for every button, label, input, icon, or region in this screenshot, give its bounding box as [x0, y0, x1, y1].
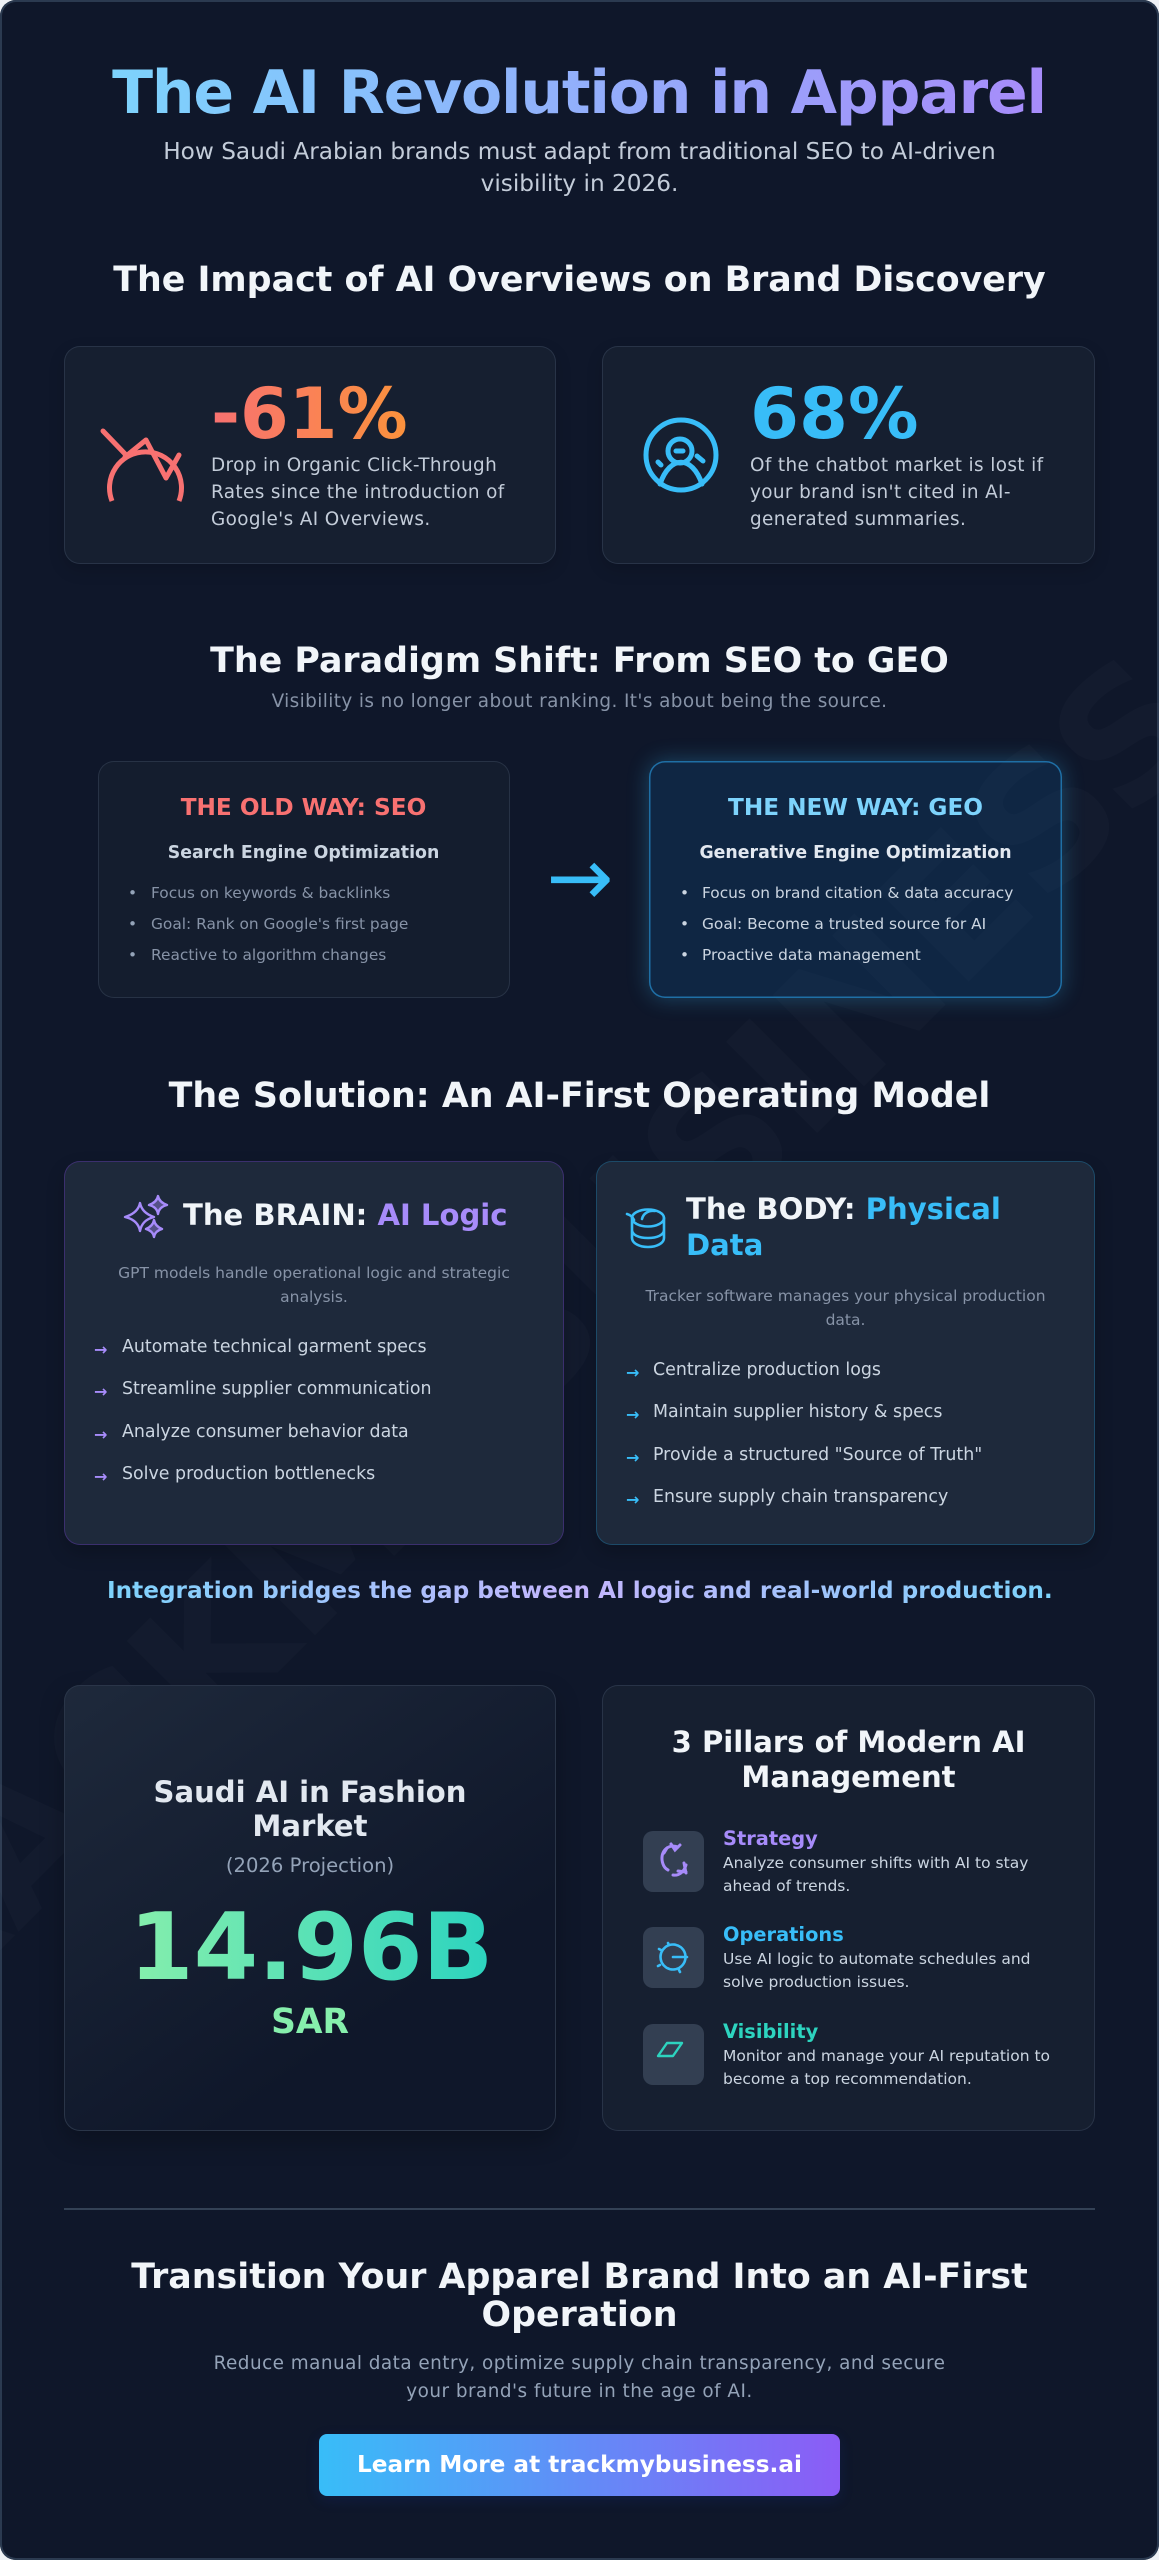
icon: strategy: [643, 1831, 704, 1892]
feature list: →: [94, 1467, 107, 1486]
panel heading: Saudi AI in Fashion: [153, 1775, 466, 1809]
call to action text: [214, 2353, 945, 2402]
panel heading: Data: [686, 1228, 763, 1262]
feature list: Streamline supplier communication: [122, 1379, 432, 1399]
call to action text: Reduce manual data entry, optimize supply chain transparency, and secure: [214, 2353, 945, 2374]
icon: sparkles: [124, 1194, 168, 1238]
feature list: →: [626, 1448, 639, 1467]
feature list: Analyze consumer behavior data: [122, 1422, 409, 1442]
heading: paradigm shift: The Paradigm Shift: From SEO to GEO: [210, 641, 949, 681]
panel heading: [672, 1725, 1025, 1794]
icon: falling chart over arc: [100, 428, 184, 502]
icon: database: [626, 1208, 666, 1248]
panel: market size: [64, 1685, 556, 2131]
pillar: visibility: [723, 2020, 1050, 2088]
market value: 14.96B: [129, 1893, 493, 2001]
feature list: Ensure supply chain transparency: [653, 1487, 948, 1507]
pillar: operations: [723, 1923, 1031, 1991]
panel heading: 3 Pillars of Modern AI: [672, 1725, 1025, 1759]
pillar description: Analyze consumer shifts with AI to stay: [723, 1854, 1028, 1872]
panel heading: Market: [252, 1809, 368, 1843]
arrow: SEO to GEO: →: [546, 831, 614, 924]
feature list: Centralize production logs: [653, 1360, 881, 1380]
stat description: Rates since the introduction of: [211, 482, 505, 503]
heading: call to action: Transition Your Apparel Brand Into an AI-First: [131, 2257, 1028, 2297]
stat description: generated summaries.: [750, 509, 966, 530]
panel description: Tracker software manages your physical production: [645, 1287, 1046, 1305]
title: The AI Revolution in Apparel: [112, 58, 1046, 128]
call to action text: your brand's future in the age of AI.: [406, 2380, 753, 2402]
feature list: →: [94, 1382, 107, 1401]
bullet list: Goal: Rank on Google's first page: [151, 915, 408, 933]
subtitle: visibility in 2026.: [481, 170, 678, 196]
feature list: →: [94, 1340, 107, 1359]
bullet list: •: [680, 946, 689, 964]
panel heading: The BODY: Physical: [686, 1192, 1001, 1226]
bullet list: Proactive data management: [702, 946, 921, 964]
stat description: Drop in Organic Click-Through: [211, 455, 497, 476]
panel: stat 68%: [602, 346, 1095, 564]
panel heading: Management: [741, 1760, 956, 1794]
stat number: -61%: [211, 373, 408, 455]
bullet list: Focus on keywords & backlinks: [151, 884, 390, 902]
pillar: strategy: [723, 1827, 1028, 1895]
panel: the body: [596, 1161, 1095, 1545]
pillar description: solve production issues.: [723, 1973, 909, 1991]
panel description: analysis.: [280, 1288, 348, 1306]
feature list: Maintain supplier history & specs: [653, 1402, 942, 1422]
icon: operations: [643, 1927, 704, 1988]
stat description: your brand isn't cited in AI-: [750, 482, 1011, 503]
panel subheading: Search Engine Optimization: [168, 843, 439, 863]
heading: call to action: [131, 2257, 1028, 2335]
stat description: [750, 455, 1044, 530]
panel heading: [686, 1192, 1001, 1262]
feature list: Automate technical garment specs: [122, 1337, 427, 1357]
stat description: Of the chatbot market is lost if: [750, 455, 1043, 476]
pillar label: Operations: [723, 1923, 844, 1946]
icon: visibility: [643, 2024, 704, 2085]
integration statement: Integration bridges the gap between AI logic and real-world production.: [107, 1577, 1053, 1604]
heading: impact of AI overviews: The Impact of AI Overviews on Brand Discovery: [113, 260, 1046, 300]
panel: new way GEO: [649, 761, 1062, 998]
panel description: data.: [826, 1310, 865, 1328]
button: learn more: Learn More at trackmybusiness.ai: [357, 2451, 802, 2478]
feature list: Provide a structured "Source of Truth": [653, 1445, 982, 1465]
heading: the solution: The Solution: An AI-First Operating Model: [169, 1076, 990, 1116]
bullet list: Reactive to algorithm changes: [151, 946, 386, 964]
section subtitle: Visibility is no longer about ranking. It's about being the source.: [272, 691, 887, 712]
pillar description: [723, 2047, 1050, 2088]
currency: SAR: [271, 2002, 349, 2042]
bullet list: Goal: Become a trusted source for AI: [702, 915, 986, 933]
subtitle: [163, 138, 996, 196]
pillar description: Monitor and manage your AI reputation to: [723, 2047, 1050, 2065]
bullet list: •: [128, 884, 137, 902]
bullet list: •: [680, 915, 689, 933]
heading: call to action: Operation: [482, 2295, 677, 2335]
feature list: →: [626, 1490, 639, 1509]
panel: old way SEO: [98, 761, 510, 998]
button: learn more: [319, 2434, 840, 2496]
projection label: (2026 Projection): [226, 1854, 394, 1877]
feature list: Solve production bottlenecks: [122, 1464, 375, 1484]
pillar label: Visibility: [723, 2020, 818, 2043]
pillar label: Strategy: [723, 1827, 818, 1850]
pillar description: become a top recommendation.: [723, 2070, 972, 2088]
pillar description: [723, 1854, 1028, 1895]
bullet list: •: [128, 915, 137, 933]
panel description: GPT models handle operational logic and strategic: [118, 1264, 510, 1282]
pillar description: Use AI logic to automate schedules and: [723, 1950, 1031, 1968]
panel subheading: Generative Engine Optimization: [699, 843, 1012, 863]
panel heading: THE OLD WAY: SEO: [181, 794, 426, 821]
panel description: [118, 1264, 510, 1306]
bullet list: •: [680, 884, 689, 902]
pillar description: [723, 1950, 1031, 1991]
panel heading: THE NEW WAY: GEO: [728, 794, 983, 821]
feature list: →: [626, 1363, 639, 1382]
subtitle: How Saudi Arabian brands must adapt from traditional SEO to AI-driven: [163, 138, 996, 165]
icon: search user circle: [644, 418, 718, 492]
bullet list: [128, 884, 408, 964]
stat description: [211, 455, 505, 530]
panel heading: The BRAIN: AI Logic: [183, 1198, 508, 1232]
feature list: →: [94, 1425, 107, 1444]
panel: the brain: [64, 1161, 564, 1545]
bullet list: [680, 884, 1013, 964]
bullet list: Focus on brand citation & data accuracy: [702, 884, 1013, 902]
panel description: [645, 1287, 1046, 1328]
panel: 3 pillars: [602, 1685, 1095, 2131]
feature list: →: [626, 1405, 639, 1424]
bullet list: •: [128, 946, 137, 964]
stat description: Google's AI Overviews.: [211, 509, 431, 530]
feature list: [94, 1337, 432, 1486]
feature list: [626, 1360, 982, 1509]
stat number: 68%: [750, 373, 918, 455]
panel heading: [153, 1775, 466, 1843]
panel: stat -61%: [64, 346, 556, 564]
pillar description: ahead of trends.: [723, 1877, 850, 1895]
